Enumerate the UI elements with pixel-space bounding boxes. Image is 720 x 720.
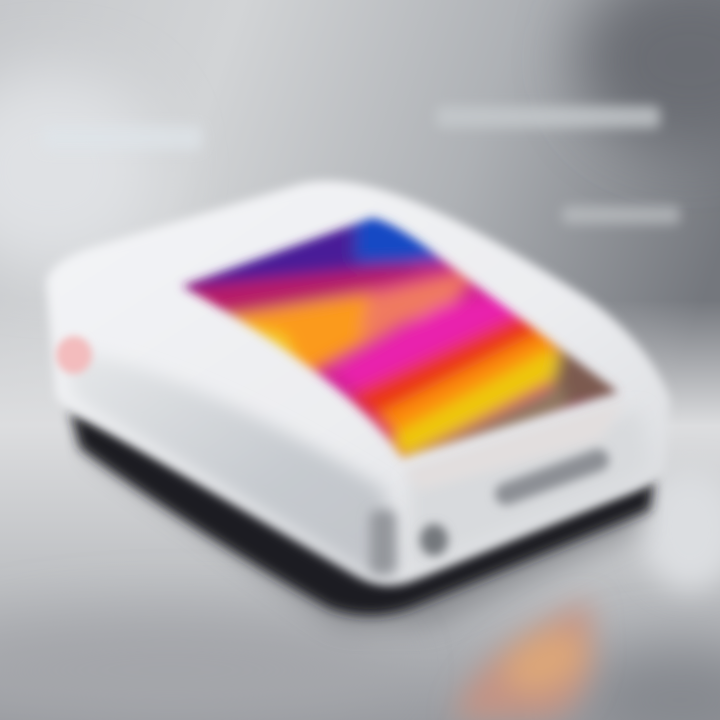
device body xyxy=(46,181,670,585)
screen band: yellow left xyxy=(246,318,300,356)
screen band: orange xyxy=(220,278,397,380)
screen band: navy purple xyxy=(182,218,418,296)
port round xyxy=(420,524,448,556)
device base: dark xyxy=(70,410,654,615)
screen band: red xyxy=(350,310,552,420)
blurred heading text right xyxy=(436,106,660,128)
screen band: brown edge xyxy=(537,342,620,410)
label slot xyxy=(506,460,598,494)
screen surround glow xyxy=(402,400,625,490)
port xyxy=(370,510,396,574)
red button xyxy=(56,336,92,374)
reflection on floor xyxy=(455,600,595,720)
screen band: yellow xyxy=(390,346,572,462)
screen band: magenta xyxy=(330,290,540,396)
right wall shading xyxy=(410,410,650,570)
blurred heading text left xyxy=(42,126,202,150)
screen band: salmon xyxy=(360,268,480,338)
screen band: orange lower xyxy=(376,328,560,436)
blurred caption text right xyxy=(562,206,680,224)
screen band: blue xyxy=(355,205,445,262)
front wall shading xyxy=(70,350,395,577)
screen band: grey-brown bottom xyxy=(405,385,570,470)
screen band: crimson xyxy=(160,262,470,322)
rainbow screen xyxy=(178,210,622,464)
device shadow xyxy=(90,420,640,625)
